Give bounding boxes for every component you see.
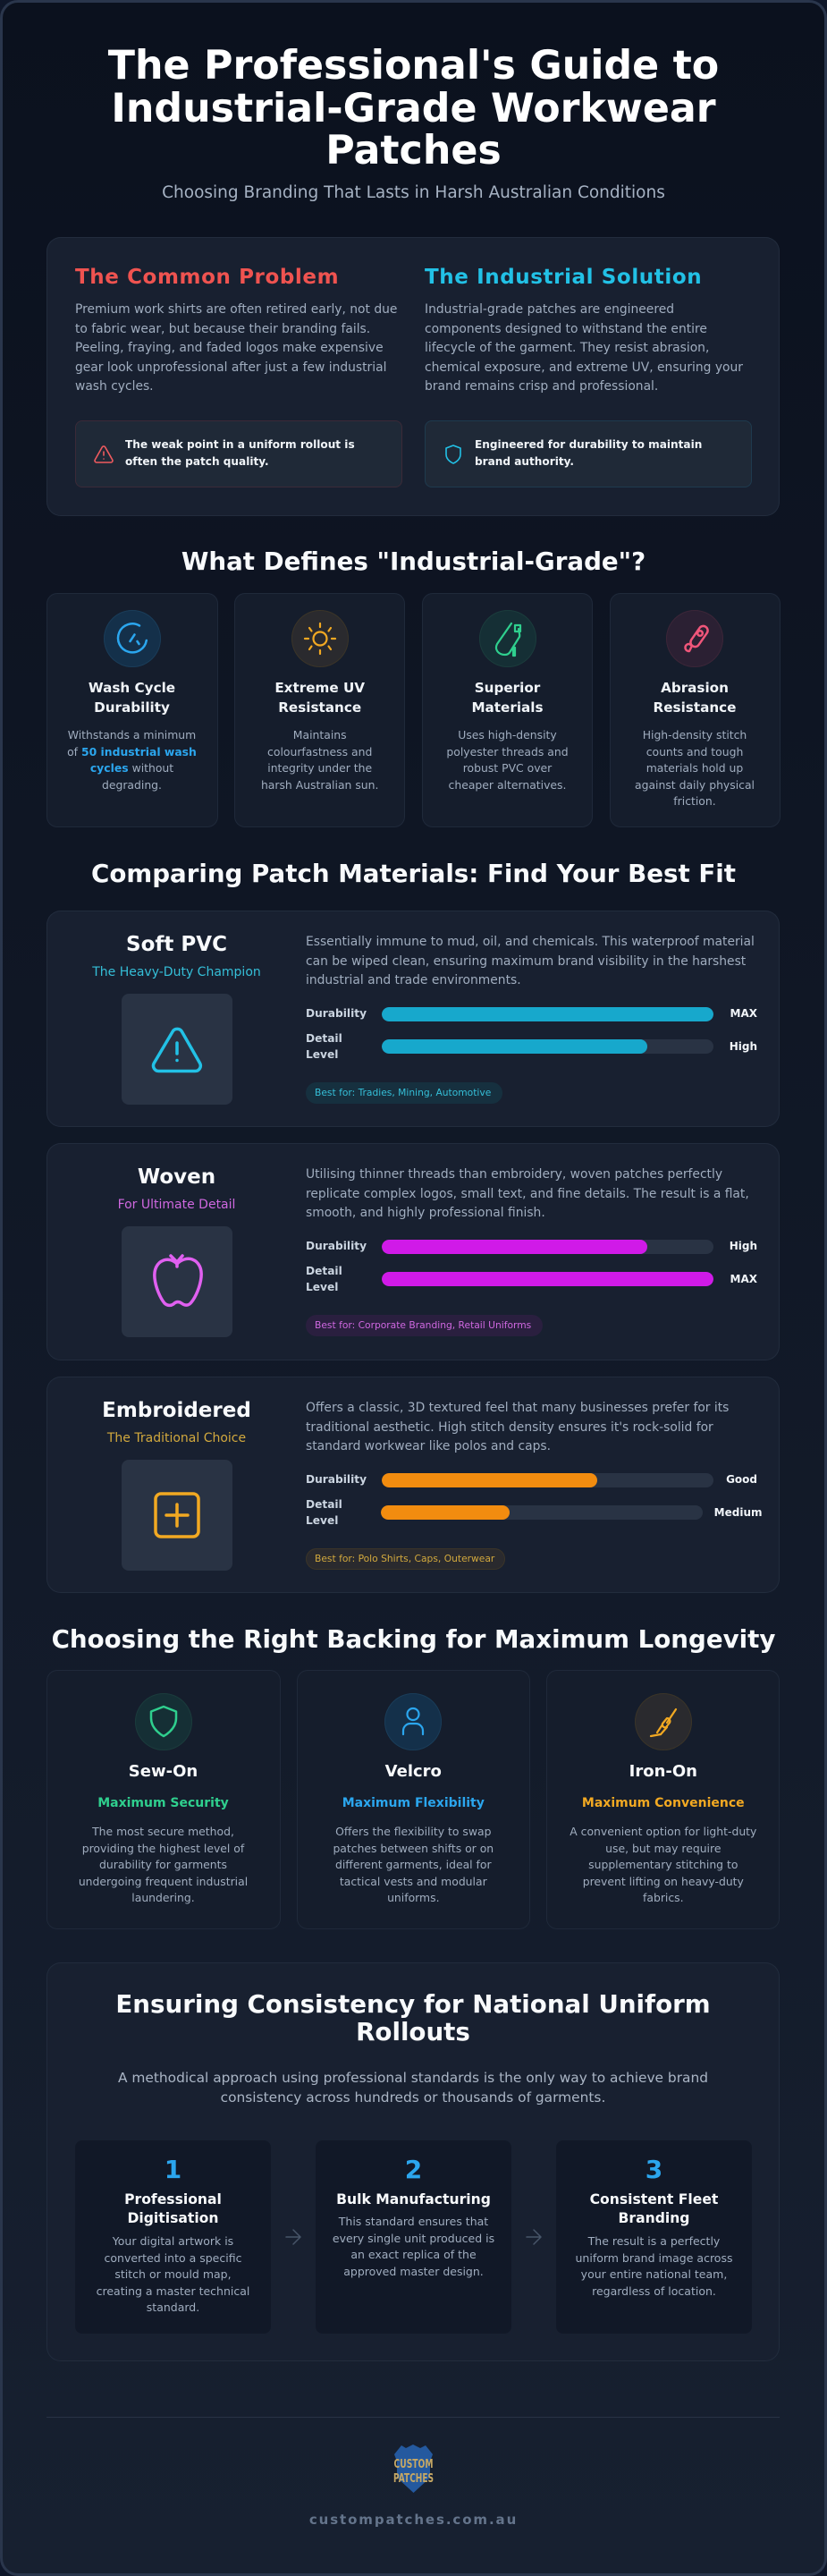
durability label: Durability — [306, 1007, 367, 1020]
card title: Resistance — [278, 699, 361, 716]
detail level bar — [381, 1505, 703, 1520]
card title: Extreme UV — [274, 680, 365, 696]
step text: converted into a specific — [105, 2251, 241, 2265]
text: problem description: Premium work shirts are often retired early, not due — [75, 302, 397, 317]
panel: superior materials — [422, 593, 593, 827]
card title — [471, 680, 544, 716]
description — [306, 935, 755, 987]
footer logo — [393, 2445, 434, 2493]
step text: an exact replica of the — [350, 2248, 477, 2261]
card title: Wash Cycle — [89, 680, 175, 696]
panel heading: Rollouts — [356, 2017, 470, 2046]
card title: Materials — [471, 699, 544, 716]
description — [306, 1401, 729, 1453]
heading: the common problem: The Common Problem — [75, 266, 339, 289]
card text: providing the highest level of — [82, 1842, 244, 1855]
best for tag — [306, 1548, 505, 1570]
footer website: custompatches.com.au — [309, 2512, 518, 2528]
durability bar — [382, 1472, 713, 1487]
description: industrial and trade environments. — [306, 973, 521, 987]
step text: The result is a perfectly — [588, 2234, 720, 2248]
card text: cycles without — [90, 761, 173, 775]
detail level label: Level — [306, 1514, 338, 1527]
heading: choosing the right backing: Choosing the Right Backing for Maximum Longevity — [52, 1624, 775, 1654]
icon: abrasion link — [666, 610, 723, 667]
detail level value: MAX — [730, 1273, 757, 1285]
card text: harsh Australian sun. — [261, 778, 378, 792]
panel intro text: A methodical approach using professional standards is the only way to achieve brand — [118, 2070, 708, 2086]
title — [107, 43, 719, 174]
text: problem description — [75, 302, 397, 394]
card text: durability for garments — [99, 1858, 227, 1871]
card title — [654, 680, 736, 716]
card text: degrading. — [102, 778, 162, 792]
material name: Embroidered — [102, 1399, 251, 1422]
step text: This standard ensures that — [339, 2215, 488, 2228]
panel: wash cycle durability — [46, 593, 218, 827]
card title — [89, 680, 175, 716]
heading: what defines industrial-grade: What Defines "Industrial-Grade"? — [181, 547, 646, 576]
step number: 3 — [646, 2154, 662, 2184]
card text: patches between shifts or on — [333, 1842, 494, 1855]
step text — [97, 2234, 249, 2314]
step text: approved master design. — [343, 2265, 484, 2278]
card text: robust PVC over — [463, 761, 552, 775]
card text: polyester threads and — [446, 745, 569, 758]
description: Utilising thinner threads than embroidery, woven patches perfectly — [306, 1167, 722, 1182]
step 1 — [75, 2140, 271, 2333]
card title: Sew-On — [129, 1762, 198, 1781]
text: solution description — [425, 302, 743, 394]
detail level label: Detail — [306, 1265, 342, 1277]
card title: Resistance — [654, 699, 736, 716]
material tagline: The Traditional Choice — [107, 1431, 246, 1445]
material name: Soft PVC — [126, 933, 227, 956]
card text — [79, 1825, 248, 1904]
panel heading: Ensuring Consistency for National Uniform — [115, 1989, 711, 2019]
card tagline: Maximum Flexibility — [342, 1796, 485, 1810]
material tagline: The Heavy-Duty Champion — [92, 965, 261, 979]
card text — [67, 728, 197, 792]
description: smooth, and highly professional finish. — [306, 1206, 545, 1220]
card text: cheaper alternatives. — [449, 778, 566, 792]
detail level label: Detail — [306, 1497, 342, 1510]
text: solution description: brand remains crisp and professional. — [425, 379, 658, 394]
best for tag: Best for: Polo Shirts, Caps, Outerwear — [315, 1553, 494, 1564]
description: replicate complex logos, small text, and fine details. The result is a flat, — [306, 1187, 749, 1201]
panel: embroidered — [46, 1377, 780, 1593]
panel: iron-on — [546, 1670, 780, 1929]
step number: 2 — [405, 2154, 422, 2184]
panel: woven — [46, 1143, 780, 1360]
durability label: Durability — [306, 1472, 367, 1485]
durability value: Good — [726, 1472, 757, 1485]
card text: use, but may require — [605, 1842, 721, 1855]
arrow: step 2 to 3 — [526, 2229, 542, 2245]
icon: wash gauge — [104, 610, 161, 667]
icon: shield — [134, 1693, 191, 1750]
panel heading — [115, 1989, 711, 2046]
detail level bar — [382, 1039, 713, 1054]
step text: every single unit produced is — [333, 2232, 494, 2245]
card title: Superior — [475, 680, 540, 696]
text: solution description: chemical exposure, and extreme UV, ensuring your — [425, 360, 743, 375]
best for tag — [306, 1082, 502, 1104]
step text: Your digital artwork is — [113, 2234, 233, 2248]
description: Essentially immune to mud, oil, and chemicals. This waterproof material — [306, 935, 755, 949]
card text: The most secure method, — [92, 1825, 234, 1838]
step text: regardless of location. — [592, 2284, 716, 2298]
step title: Digitisation — [127, 2210, 218, 2226]
heading: comparing patch materials: Comparing Patch Materials: Find Your Best Fit — [91, 859, 736, 888]
card title: Iron-On — [629, 1762, 697, 1781]
step text — [576, 2234, 732, 2298]
detail level label: Detail — [306, 1032, 342, 1045]
text: problem description: to fabric wear, but because their branding fails. — [75, 322, 370, 336]
detail level value: Medium — [714, 1506, 762, 1519]
step text: creating a master technical — [97, 2284, 249, 2298]
detail level bar — [382, 1272, 713, 1286]
panel intro text — [118, 2070, 708, 2106]
step text: standard. — [147, 2301, 199, 2314]
description: Offers a classic, 3D textured feel that many businesses prefer for its — [306, 1401, 729, 1415]
card text: of 50 industrial wash — [67, 745, 197, 758]
step title: Bulk Manufacturing — [336, 2191, 491, 2207]
card text: Offers the flexibility to swap — [335, 1825, 492, 1838]
icon: woven apple — [122, 1226, 232, 1337]
step title — [590, 2191, 718, 2226]
card text — [570, 1825, 756, 1904]
panel: abrasion resistance — [610, 593, 780, 827]
icon: shield — [445, 445, 461, 464]
card text: undergoing frequent industrial — [79, 1875, 248, 1888]
card text: different garments, ideal for — [335, 1858, 492, 1871]
card title — [274, 680, 365, 716]
callout text: brand authority. — [475, 455, 574, 468]
panel intro text: consistency across hundreds or thousands of garments. — [221, 2089, 605, 2106]
card text: friction. — [673, 794, 716, 808]
durability label: Durability — [306, 1240, 367, 1252]
text: problem description: gear look unprofessional after just a few industrial — [75, 360, 386, 375]
icon: person — [384, 1693, 442, 1750]
material name: Woven — [138, 1165, 215, 1189]
detail level value: High — [730, 1040, 757, 1053]
step title: Branding — [619, 2210, 689, 2226]
text: solution description: Industrial-grade patches are engineered — [425, 302, 674, 317]
text: solution description: components designed to withstand the entire — [425, 322, 707, 336]
card text: High-density stitch — [643, 728, 747, 741]
card text: colourfastness and — [267, 745, 372, 758]
callout text: often the patch quality. — [125, 455, 269, 468]
card text: prevent lifting on heavy-duty — [583, 1875, 744, 1888]
card text — [333, 1825, 494, 1904]
card text: integrity under the — [267, 761, 372, 775]
step title: Consistent Fleet — [590, 2191, 718, 2207]
best for tag: Best for: Corporate Branding, Retail Uniforms — [315, 1319, 531, 1331]
card text: fabrics. — [643, 1891, 684, 1904]
panel: national uniform rollouts — [46, 1962, 780, 2361]
card tagline: Maximum Convenience — [582, 1796, 745, 1810]
panel: velcro — [297, 1670, 530, 1929]
description: can be wiped clean, ensuring maximum brand visibility in the harshest — [306, 954, 746, 969]
icon: iron brush — [635, 1693, 692, 1750]
step 3 — [556, 2140, 752, 2333]
card text: A convenient option for light-duty — [570, 1825, 756, 1838]
description — [306, 1167, 749, 1220]
title: The Professional's Guide to — [108, 43, 719, 89]
card text: uniforms. — [387, 1891, 440, 1904]
panel: problem and solution — [46, 237, 780, 516]
detail level label: Level — [306, 1048, 338, 1061]
callout text: Engineered for durability to maintain — [475, 438, 702, 451]
step text: uniform brand image across — [576, 2251, 732, 2265]
card text: Maintains — [293, 728, 347, 741]
material tagline: For Ultimate Detail — [118, 1198, 235, 1212]
detail level label — [306, 1032, 342, 1061]
card text: counts and tough — [646, 745, 743, 758]
panel: soft pvc — [46, 911, 780, 1127]
durability value: MAX — [730, 1007, 757, 1020]
text: solution description: lifecycle of the garment. They resist abrasion, — [425, 341, 709, 355]
step title: Professional — [124, 2191, 222, 2207]
card text — [635, 728, 755, 808]
best for tag — [306, 1315, 543, 1336]
card text — [446, 728, 569, 792]
step 2 — [316, 2140, 511, 2333]
callout text: The weak point in a uniform rollout is — [125, 438, 355, 451]
card text: laundering. — [131, 1891, 195, 1904]
arrow: step 1 to 2 — [285, 2229, 301, 2245]
callout: weak point — [75, 420, 402, 487]
icon: warning triangle — [94, 445, 114, 463]
panel: sew-on — [46, 1670, 281, 1929]
detail level label — [306, 1497, 342, 1527]
card text: against daily physical — [635, 778, 755, 792]
text: problem description: Peeling, fraying, and faded logos make expensive — [75, 341, 384, 355]
heading: the industrial solution: The Industrial Solution — [425, 266, 702, 289]
step text: stitch or mould map, — [114, 2267, 232, 2281]
detail level label: Level — [306, 1281, 338, 1293]
panel: extreme uv resistance — [234, 593, 405, 827]
step text: your entire national team, — [581, 2267, 727, 2281]
card text: Withstands a minimum — [68, 728, 196, 741]
callout text — [125, 438, 355, 468]
card title: Durability — [94, 699, 170, 716]
card text: tactical vests and modular — [340, 1875, 487, 1888]
subtitle: Choosing Branding That Lasts in Harsh Australian Conditions — [162, 183, 665, 202]
durability bar — [382, 1240, 713, 1254]
step text — [333, 2215, 494, 2278]
durability bar — [382, 1007, 713, 1021]
icon: materials — [479, 610, 536, 667]
best for tag: Best for: Tradies, Mining, Automotive — [315, 1087, 491, 1098]
icon: pvc warning triangle — [122, 994, 232, 1105]
callout text — [475, 438, 702, 468]
card text: supplementary stitching to — [588, 1858, 738, 1871]
card tagline: Maximum Security — [97, 1796, 229, 1810]
card text: Uses high-density — [458, 728, 557, 741]
card text: materials hold up — [646, 761, 743, 775]
title: Industrial-Grade Workwear — [111, 86, 716, 131]
description: traditional aesthetic. High stitch density ensures it's rock-solid for — [306, 1420, 713, 1435]
title: Patches — [325, 128, 502, 174]
icon: embroidered plus box — [122, 1460, 232, 1571]
text: problem description: wash cycles. — [75, 379, 154, 394]
durability value: High — [730, 1240, 757, 1252]
description: standard workwear like polos and caps. — [306, 1439, 551, 1453]
step number: 1 — [165, 2154, 181, 2184]
card text — [261, 728, 378, 792]
step title — [124, 2191, 222, 2226]
icon: sun — [291, 610, 349, 667]
card title: Abrasion — [661, 680, 729, 696]
detail level label — [306, 1265, 342, 1293]
card title: Velcro — [385, 1762, 442, 1781]
callout: engineered for durability — [425, 420, 752, 487]
